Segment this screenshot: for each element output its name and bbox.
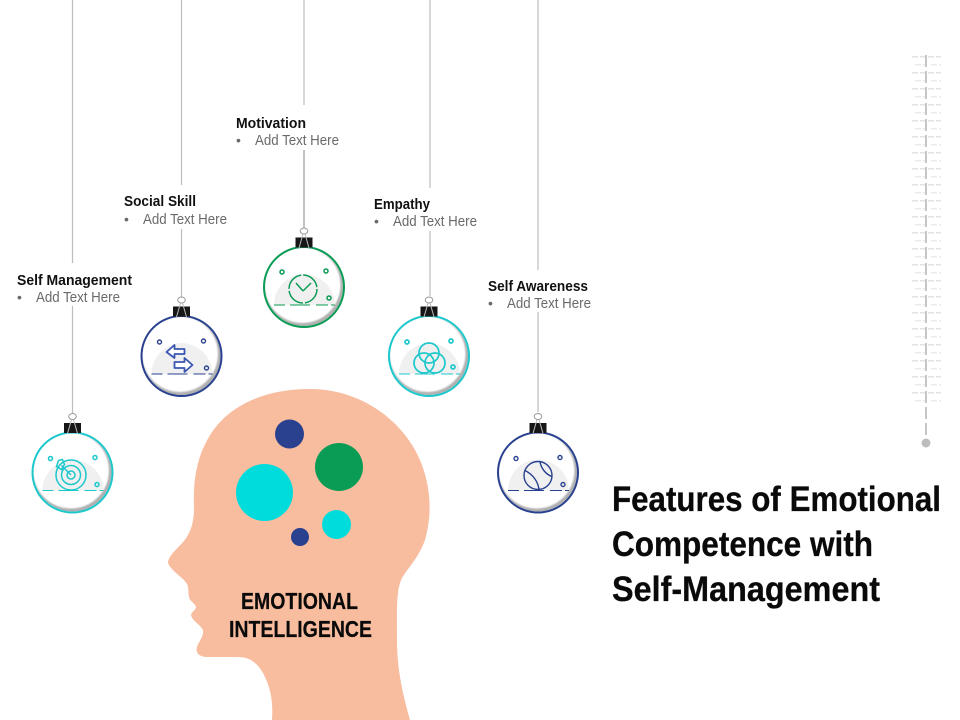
ornament: self awareness ball xyxy=(498,414,578,512)
ornament: empathy venn xyxy=(389,297,469,396)
label: empathy: Add Text Here xyxy=(393,213,477,230)
label: self awareness: Add Text Here xyxy=(507,295,591,312)
label: self management: Add Text Here xyxy=(36,289,120,306)
label: social skill xyxy=(124,193,227,228)
label: motivation: Motivation xyxy=(236,115,306,132)
hanging strings xyxy=(72,0,538,413)
ornament: motivation clock xyxy=(264,228,344,327)
ornament: social skill arrows xyxy=(142,297,222,396)
label: social skill: Social Skill xyxy=(124,193,196,210)
label: empathy: Empathy xyxy=(374,196,431,213)
title xyxy=(612,480,941,609)
label: self awareness: Self Awareness xyxy=(488,278,588,295)
label: self awareness: • xyxy=(488,295,493,311)
head silhouette xyxy=(168,389,430,720)
ornament: self management target xyxy=(32,414,112,512)
label: self management: Self Management xyxy=(17,272,132,289)
head label: EMOTIONAL xyxy=(241,588,358,614)
label: self management xyxy=(17,272,132,306)
label: motivation: • xyxy=(236,132,241,148)
label: self awareness xyxy=(488,278,591,312)
title: Competence with xyxy=(612,525,873,564)
decorative scale at right xyxy=(912,55,941,448)
label: motivation: Add Text Here xyxy=(255,132,339,149)
brain dots xyxy=(236,420,363,546)
label: social skill: Add Text Here xyxy=(143,211,227,228)
label: empathy xyxy=(374,196,477,230)
head label: INTELLIGENCE xyxy=(229,616,372,642)
label: social skill: • xyxy=(124,211,129,227)
label: motivation xyxy=(236,115,339,149)
head label xyxy=(229,588,372,642)
label: empathy: • xyxy=(374,213,379,229)
title: Self-Management xyxy=(612,570,880,609)
label: self management: • xyxy=(17,289,22,305)
